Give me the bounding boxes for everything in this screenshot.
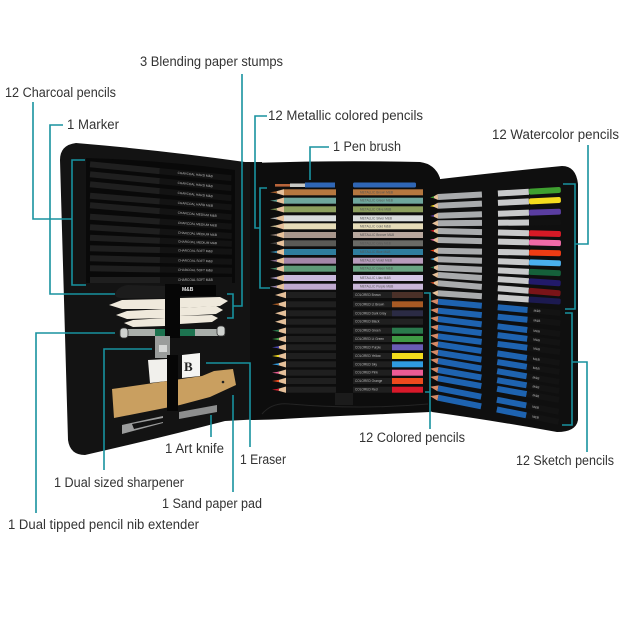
panel: right flap xyxy=(432,166,578,432)
dual sized sharpener xyxy=(155,336,170,358)
colored pencils: COLORED Lt Green xyxy=(355,337,384,341)
sketch pencils: M&B xyxy=(533,347,540,351)
metallic colored pencils: METALLIC Green M&B xyxy=(360,199,393,203)
arrow: sharpener xyxy=(104,349,152,470)
metallic colored pencils: METALLIC Blue M&B xyxy=(360,250,390,254)
sketch pencils: M&B xyxy=(533,329,540,334)
label: sharpener: 1 Dual sized sharpener xyxy=(54,475,184,490)
colored pencils: COLORED Orange xyxy=(355,379,383,383)
colored pencils: COLORED Black xyxy=(355,320,380,324)
metallic colored pencils: METALLIC Gold M&B xyxy=(360,224,391,228)
charcoal pencils: CHARCOAL MEDIUM M&B xyxy=(178,231,217,237)
label: extender: 1 Dual tipped pencil nib extender xyxy=(8,517,199,532)
lower elastic band xyxy=(167,355,178,411)
arrow: art knife xyxy=(210,415,212,437)
metallic colored pencils: METALLIC Green M&B xyxy=(360,267,393,271)
charcoal pencils: CHARCOAL SOFT M&B xyxy=(178,248,213,253)
arrow: watercolor xyxy=(563,145,588,309)
arrow: pen brush xyxy=(310,147,329,180)
colored pencils xyxy=(272,292,423,393)
label: eraser: 1 Eraser xyxy=(240,452,286,467)
metallic colored pencils: METALLIC Purple M&B xyxy=(360,285,393,289)
metallic colored pencils: METALLIC Silver M&B xyxy=(360,216,392,220)
panel: centre flap xyxy=(250,161,440,420)
metallic colored pencils: METALLIC Olive M&B xyxy=(360,207,391,211)
label: watercolor: 12 Watercolor pencils xyxy=(492,127,619,142)
left pocket shade xyxy=(86,158,235,283)
charcoal pencils: CHARCOAL MEDIUM M&B xyxy=(178,221,217,228)
metallic colored pencils: METALLIC Grey M&B xyxy=(360,241,391,245)
metallic colored pencils: METALLIC Lilac M&B xyxy=(360,276,391,280)
label: marker: 1 Marker xyxy=(67,117,119,132)
arrow: marker xyxy=(50,125,115,294)
arrow: stumps xyxy=(227,74,242,318)
sketch pencils: M&B xyxy=(532,405,539,410)
charcoal pencils: CHARCOAL HARD M&B xyxy=(177,171,213,178)
label: metallic: 12 Metallic colored pencils xyxy=(268,108,423,123)
pen brush xyxy=(275,182,416,188)
sketch pencils: M&B xyxy=(532,393,540,398)
sketch pencils: M&B xyxy=(532,375,540,380)
label: art knife: 1 Art knife xyxy=(165,441,224,456)
sketch pencils: M&B xyxy=(533,338,540,342)
sketch pencils: M&B xyxy=(532,415,539,420)
art knife xyxy=(122,405,217,434)
centre pocket flap xyxy=(262,404,428,414)
charcoal pencils: CHARCOAL HARD M&B xyxy=(178,201,213,208)
arrow: sand pad xyxy=(232,395,234,492)
blending paper stumps xyxy=(109,297,228,327)
label: stumps: 3 Blending paper stumps xyxy=(140,54,283,69)
sketch pencils: M&B xyxy=(532,384,540,389)
colored pencils: COLORED Sky xyxy=(355,362,377,366)
arrow: charcoal bracket xyxy=(33,102,86,285)
colored pencils: COLORED Purple xyxy=(355,345,381,349)
charcoal pencils: CHARCOAL SOFT M&B xyxy=(178,278,213,282)
colored pencils: COLORED Yellow xyxy=(355,354,381,358)
metallic colored pencils: METALLIC Bronze M&B xyxy=(360,233,394,237)
label: sand pad: 1 Sand paper pad xyxy=(162,496,262,511)
metallic colored pencils: METALLIC Violet M&B xyxy=(360,259,392,263)
sand paper pad xyxy=(112,369,236,418)
label: colored: 12 Colored pencils xyxy=(359,430,465,445)
erasers xyxy=(148,353,200,383)
sketch pencils: M&B xyxy=(533,366,540,371)
colored pencils: COLORED Green xyxy=(355,329,381,333)
centre pencil retainer xyxy=(335,393,353,405)
charcoal pencils: CHARCOAL SOFT M&B xyxy=(178,268,213,272)
pencil nib extender xyxy=(120,326,225,338)
charcoal pencils: CHARCOAL MEDIUM M&B xyxy=(178,240,217,245)
colored pencils: COLORED Lt Brown xyxy=(355,302,384,306)
sketch pencils: M&B xyxy=(533,357,540,362)
callout lines xyxy=(33,74,588,513)
colored pencils: COLORED Pink xyxy=(355,371,378,375)
arrow: eraser xyxy=(206,363,250,447)
colored pencils: COLORED Dark Gray xyxy=(355,311,387,315)
metallic colored pencils: METALLIC Brown M&B xyxy=(360,190,393,194)
zip case xyxy=(60,143,578,455)
label: sketch: 12 Sketch pencils xyxy=(516,453,614,468)
colored pencils: COLORED Brown xyxy=(355,293,381,297)
metallic colored pencils xyxy=(270,189,423,290)
charcoal pencils: CHARCOAL HARD M&B xyxy=(177,191,213,198)
colored pencils: COLORED Red xyxy=(355,388,378,392)
arrow: sketch xyxy=(562,313,587,452)
charcoal pencils: CHARCOAL HARD M&B xyxy=(177,181,213,188)
erasers: B xyxy=(184,359,193,374)
charcoal pencils: CHARCOAL SOFT M&B xyxy=(178,258,213,263)
label: pen brush: 1 Pen brush xyxy=(333,139,401,154)
arrow: extender xyxy=(36,333,115,513)
upper elastic band xyxy=(165,284,180,338)
charcoal pencils: CHARCOAL MEDIUM M&B xyxy=(178,211,217,218)
marker xyxy=(115,285,216,298)
label: charcoal: 12 Charcoal pencils xyxy=(5,85,116,100)
sketch pencils: M&B xyxy=(533,309,541,313)
arrow: colored xyxy=(424,293,430,429)
sketch pencils: M&B xyxy=(533,318,541,323)
marker: M&B xyxy=(182,287,194,293)
panel: left flap xyxy=(60,143,262,455)
sketch pencils xyxy=(430,298,561,425)
charcoal pencils xyxy=(90,161,232,283)
watercolor pencils xyxy=(430,187,561,305)
arrow: metallic xyxy=(255,116,270,288)
